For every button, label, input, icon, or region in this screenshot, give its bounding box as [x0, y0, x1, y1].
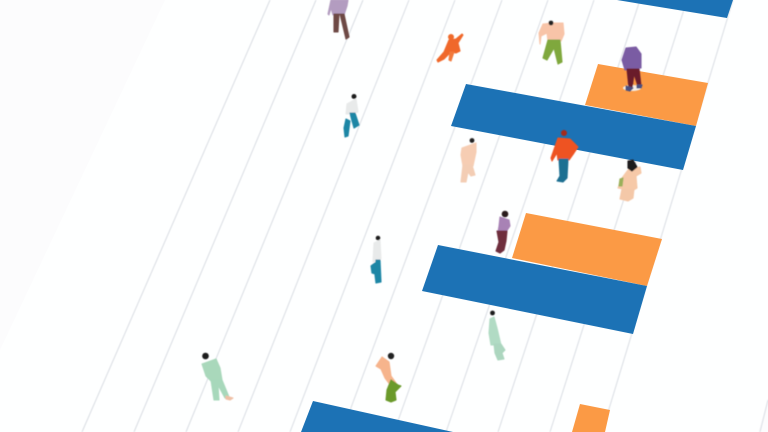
bar: orange middle [512, 213, 662, 286]
bar: orange bottom [572, 404, 610, 432]
figure: purple jacket on orange bar [622, 47, 642, 91]
bar: blue middle [422, 245, 647, 334]
bar: blue upper [451, 84, 696, 170]
figure: peach top green trousers bottom [376, 353, 401, 402]
figure: red jacket teal jeans [551, 130, 578, 182]
figure: mint suit centre [489, 311, 505, 360]
figure: white shirt teal trousers upper [344, 94, 359, 137]
figure: peach person left [461, 138, 476, 182]
bar: top blue [617, 0, 733, 18]
bar: orange upper [585, 64, 708, 126]
paper edge shading [0, 0, 165, 350]
figure: white shirt teal trousers middle [371, 236, 381, 283]
bar chart bars [301, 0, 733, 432]
bar: blue bottom [301, 401, 453, 432]
figure: purple and maroon woman [496, 211, 510, 253]
figure: lilac person at top [328, 0, 349, 39]
figure: orange runner [437, 34, 463, 62]
figure: peach shirt green trousers [539, 21, 564, 64]
figure: peach woman dark hair [618, 160, 641, 201]
figure: mint suit left [202, 353, 233, 400]
